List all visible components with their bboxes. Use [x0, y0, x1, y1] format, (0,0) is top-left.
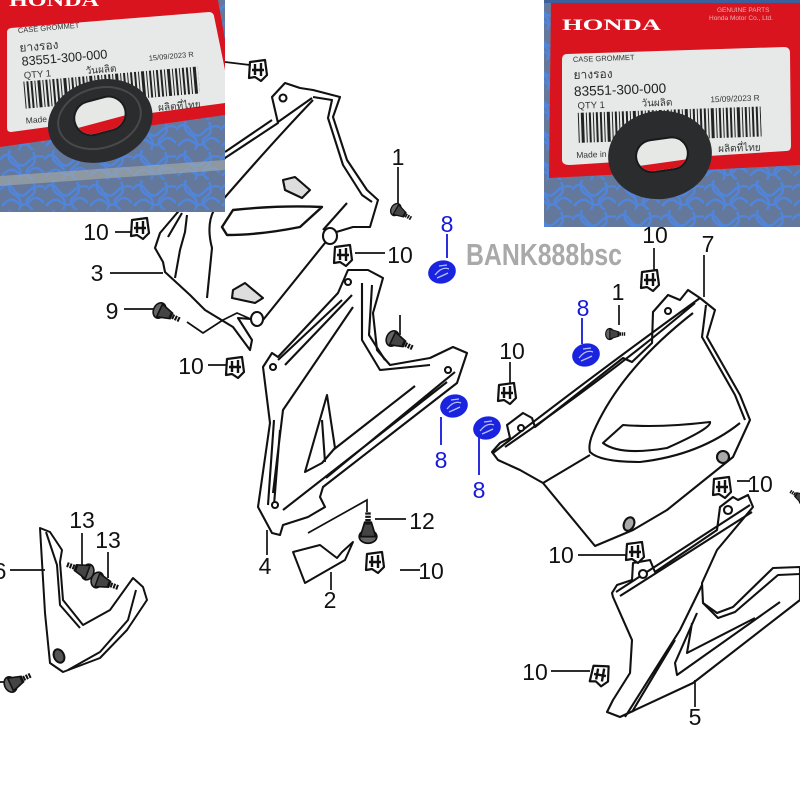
- photo: grommet on label, right: 83551-300-000: [574, 81, 667, 99]
- diagram part 7: right upper cover: [492, 290, 750, 546]
- highlighted part 8 grommets with labels: 8: [473, 477, 485, 503]
- product label: 15/09/2023 R: [148, 50, 195, 63]
- diagram part 4: centre cover: [258, 270, 467, 535]
- product label: [562, 47, 791, 165]
- diagram part 6: lower left cover: [40, 528, 147, 672]
- part number labels: 10: [548, 542, 574, 568]
- highlighted part 8 grommets with labels: 8: [441, 211, 453, 237]
- product label: QTY 1: [23, 68, 52, 82]
- highlighted part 8 grommets with labels: 8: [435, 447, 447, 473]
- brand name: HONDA: [562, 17, 662, 34]
- product label: [7, 11, 225, 132]
- product label: Made in THAILAND: [25, 109, 100, 126]
- photo: grommet on label, right: 15/09/2023 R: [710, 94, 760, 104]
- speed clips: [131, 60, 731, 687]
- mounting boss: [323, 228, 337, 244]
- highlighted part 8 grommets with labels: [426, 211, 602, 503]
- part number labels: 5: [689, 704, 701, 730]
- part number labels: 1: [392, 144, 404, 170]
- part number labels: 2: [324, 587, 336, 613]
- product label: 83551-300-000: [21, 47, 108, 69]
- part number labels: 7: [702, 231, 714, 257]
- photo: grommet on label, right: ผลิตที่ไทย: [718, 140, 761, 155]
- photo: grommet on label, right: วันผลิต: [641, 98, 673, 110]
- photo: grommet on label, right: [544, 0, 800, 227]
- genuine parts text: GENUINE PARTS: [717, 7, 770, 14]
- part number labels: 10: [522, 659, 548, 685]
- part number labels: 3: [91, 260, 103, 286]
- part number labels: 10: [83, 219, 109, 245]
- product label: วันผลิต: [85, 64, 117, 77]
- part number labels: 10: [418, 558, 444, 584]
- photo: grommet on label, right: Made in THAILAND: [576, 147, 651, 160]
- genuine parts text: Honda Motor Co., Ltd.: [709, 15, 773, 22]
- part number labels: 10: [747, 471, 773, 497]
- photo: grommet on label, right: QTY 1: [577, 100, 605, 112]
- diagram part 3: upper left side cover: [155, 83, 378, 350]
- part number labels: 13: [69, 507, 95, 533]
- photo: grommet on label, right: ยางรอง: [573, 67, 613, 82]
- part number labels: 10: [178, 353, 204, 379]
- genuine parts text: [710, 8, 772, 21]
- rubber grommet: [608, 110, 712, 200]
- watermark: BANK888bsc: [466, 237, 622, 272]
- product label: CASE GROMMET: [17, 21, 80, 35]
- bolts: [2, 202, 800, 694]
- part number labels: [0, 144, 773, 730]
- photo: grommet on label, right: CASE GROMMET: [573, 53, 635, 64]
- part number labels: 1: [612, 279, 624, 305]
- part number labels: 10: [499, 338, 525, 364]
- part number labels: 12: [409, 508, 435, 534]
- diagram part 5: lower right cover: [607, 495, 800, 717]
- rubber grommet: [48, 79, 153, 163]
- part number labels: 13: [95, 527, 121, 553]
- product label: ยางรอง: [19, 38, 59, 55]
- part number labels: 9: [106, 298, 118, 324]
- fasteners and leader lines: [0, 60, 750, 707]
- part number labels: 4: [259, 553, 272, 579]
- part number labels: 10: [387, 242, 413, 268]
- diagram part 2: small panel: [293, 542, 353, 583]
- product label: ผลิตที่ไทย: [157, 96, 201, 114]
- photo: grommet on label, left: [0, 0, 225, 212]
- part number labels: 10: [642, 222, 668, 248]
- highlighted part 8 grommets with labels: 8: [577, 295, 589, 321]
